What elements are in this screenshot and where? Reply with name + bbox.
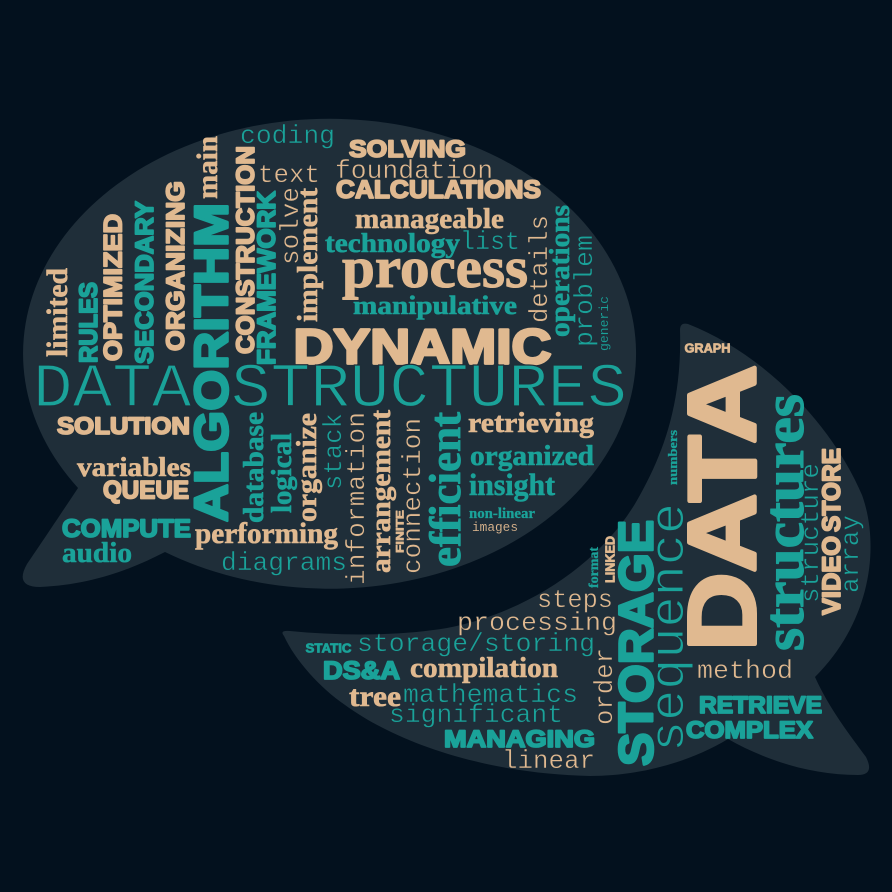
- word: structure: structure: [796, 463, 826, 603]
- word: array: array: [836, 515, 866, 593]
- word: images: images: [472, 520, 518, 535]
- word: implement: implement: [292, 188, 324, 322]
- word: limited: limited: [41, 268, 74, 357]
- title words: DATA STRUCTURES: DATA STRUCTURES: [33, 354, 627, 425]
- word: storage/storing: storage/storing: [357, 629, 595, 659]
- panel: right speech bubble: [282, 324, 871, 776]
- word: organized: organized: [470, 441, 594, 472]
- word: foundation: foundation: [335, 156, 493, 186]
- word: technology: technology: [325, 228, 461, 258]
- word: retrieving: retrieving: [468, 408, 594, 439]
- word: COMPLEX: COMPLEX: [686, 717, 813, 744]
- panel: left speech bubble: [23, 119, 636, 589]
- word: QUEUE: QUEUE: [103, 476, 189, 504]
- word: CONSTRUCTION: CONSTRUCTION: [232, 146, 260, 354]
- word: FRAMEWORK: FRAMEWORK: [253, 191, 281, 365]
- word: problem: problem: [570, 235, 600, 347]
- word: processing: processing: [457, 608, 617, 638]
- word: non-linear: non-linear: [469, 506, 535, 522]
- word: STORAGE: STORAGE: [611, 520, 664, 766]
- word: CALCULATIONS: CALCULATIONS: [336, 176, 541, 204]
- word: connection: connection: [398, 418, 428, 574]
- word: numbers: numbers: [665, 430, 680, 485]
- word: VIDEO: VIDEO: [818, 536, 846, 615]
- word: compilation: compilation: [410, 652, 558, 684]
- word: RULES: RULES: [75, 282, 103, 363]
- word: STORE: STORE: [818, 448, 846, 532]
- word: manipulative: manipulative: [353, 291, 517, 320]
- word: variables: variables: [77, 452, 191, 482]
- word: coding: coding: [240, 121, 335, 151]
- word: LINKED: LINKED: [603, 536, 618, 583]
- word: insight: insight: [469, 467, 556, 502]
- word: list: list: [460, 227, 520, 257]
- word: process: process: [342, 235, 528, 300]
- word: arrangement: arrangement: [365, 410, 397, 573]
- word: stack: stack: [319, 413, 349, 490]
- word: operations: operations: [544, 205, 576, 337]
- word: text: text: [258, 160, 320, 190]
- word: logical: logical: [266, 433, 298, 513]
- word: SOLUTION: SOLUTION: [57, 413, 190, 440]
- word: database: database: [239, 412, 270, 523]
- word: SOLVING: SOLVING: [349, 136, 466, 163]
- word: STATIC: STATIC: [306, 641, 352, 656]
- word: DYNAMIC: DYNAMIC: [294, 321, 552, 375]
- word: linear: linear: [502, 746, 595, 776]
- word: information: information: [342, 412, 372, 585]
- word: structures: structures: [753, 394, 816, 651]
- word: ORGANIZING: ORGANIZING: [162, 181, 190, 351]
- word: GRAPH: GRAPH: [684, 341, 730, 356]
- word: generic: generic: [597, 296, 612, 351]
- word: order: order: [590, 648, 620, 725]
- word: SECONDARY: SECONDARY: [131, 201, 159, 364]
- word: diagrams: diagrams: [221, 548, 347, 578]
- word: audio: audio: [62, 537, 132, 569]
- word: steps: steps: [537, 585, 613, 615]
- word: sequence: sequence: [644, 503, 698, 752]
- word: MANAGING: MANAGING: [444, 726, 595, 753]
- word: format: format: [587, 547, 602, 588]
- word: OPTIMIZED: OPTIMIZED: [100, 214, 128, 361]
- word: solve: solve: [276, 187, 306, 265]
- word: DATA: DATA: [669, 365, 776, 651]
- word: significant: significant: [389, 700, 563, 730]
- word: method: method: [697, 656, 793, 686]
- word: tree: tree: [349, 680, 401, 713]
- word: RETRIEVE: RETRIEVE: [699, 692, 822, 719]
- bubble shape: left: [23, 119, 636, 589]
- word: COMPUTE: COMPUTE: [62, 515, 191, 543]
- word: performing: performing: [195, 517, 338, 550]
- word: efficient: efficient: [421, 412, 470, 567]
- word: mathematics: mathematics: [403, 680, 578, 710]
- bubble shape: right: [282, 324, 871, 776]
- word: ALGORITHM: ALGORITHM: [185, 203, 238, 522]
- word: main: main: [191, 136, 224, 199]
- word: details: details: [525, 215, 555, 323]
- word: FINITE: FINITE: [395, 510, 407, 553]
- word: organize: organize: [292, 413, 323, 522]
- word: DS&A: DS&A: [323, 657, 400, 685]
- word: manageable: manageable: [355, 204, 504, 235]
